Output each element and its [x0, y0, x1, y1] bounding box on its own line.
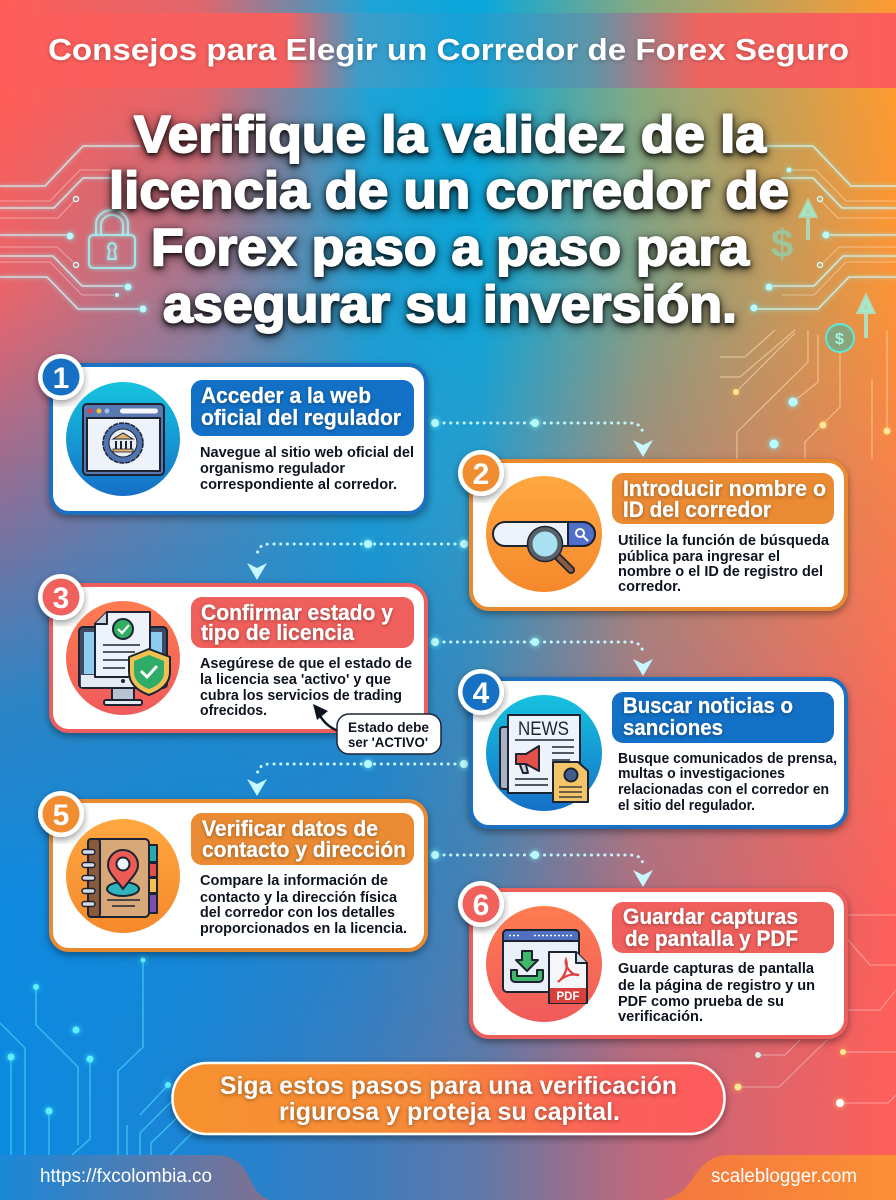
- text: step 3: cubra los servicios de trading: [200, 688, 402, 704]
- icon: download window and PDF file: PDF: [556, 991, 580, 1003]
- badge: number 2: [458, 450, 504, 496]
- badge: number 5: [38, 791, 84, 837]
- text: step 5: [200, 873, 407, 937]
- text: step 2: nombre o el ID de registro del: [618, 564, 823, 580]
- heading: step 3: Confirmar estado y: [201, 600, 394, 625]
- icon: background padlock: [89, 210, 135, 268]
- icon: monitor, licence document and shield: [66, 601, 180, 715]
- footer tab: right url: scaleblogger.com: [711, 1166, 857, 1187]
- circuit lines: upper right: [720, 330, 890, 459]
- heading: step 2: Introducir nombre o: [623, 476, 826, 501]
- icon: browser with regulator seal: [66, 382, 180, 496]
- icon: newspaper with megaphone: NEWS: [518, 719, 569, 740]
- icon: background dollar and arrow: $: [771, 222, 793, 266]
- header band: [0, 13, 896, 88]
- text: step 5: proporcionados en la licencia.: [200, 921, 407, 937]
- badge: number 6: 6: [473, 889, 489, 922]
- main title: licencia de un corredor de: [109, 162, 789, 220]
- text: step 5: del corredor con los detalles: [200, 905, 395, 921]
- footer tab: left url: [0, 1155, 270, 1200]
- main title: Verifique la validez de la: [134, 106, 767, 164]
- heading: step 4: sanciones: [623, 715, 723, 740]
- text: step 3: [200, 656, 412, 719]
- icon: background coin and arrow: $: [835, 331, 844, 348]
- text: step 6: de la página de registro y un: [618, 978, 815, 994]
- main title: asegurar su inversión.: [163, 276, 737, 334]
- panel: step 3: [38, 574, 441, 754]
- text: step 2: [618, 533, 830, 595]
- heading: step 5: [191, 813, 414, 865]
- heading: step 1: oficial del regulador: [201, 405, 401, 430]
- icon: address book with location pin: [66, 819, 180, 933]
- panel: step 2: [458, 450, 846, 609]
- callout: estado debe ser activo: [313, 704, 441, 754]
- icon: background coin and arrow: [826, 297, 873, 352]
- arrow: step 4 to 5: [247, 760, 468, 796]
- icon: search bar with magnifier: [486, 476, 602, 592]
- heading: step 1: Acceder a la web: [201, 383, 371, 408]
- circuit lines: lower left: [0, 958, 200, 1155]
- heading: step 6: de pantalla y PDF: [625, 926, 798, 951]
- text: step 5: Compare la información de: [200, 873, 388, 889]
- callout: closing message: Siga estos pasos para una verificación: [220, 1072, 677, 1100]
- text: step 1: organismo regulador: [200, 461, 345, 477]
- badge: number 3: [38, 574, 84, 620]
- badge: number 1: [38, 354, 84, 400]
- text: step 5: contacto y la dirección física: [200, 890, 398, 906]
- heading: step 6: [612, 902, 834, 953]
- circuit lines: title area: [0, 146, 896, 312]
- heading: step 4: [612, 692, 834, 743]
- text: step 1: correspondiente al corredor.: [200, 477, 397, 493]
- main title: [109, 106, 789, 334]
- text: step 2: corredor.: [618, 579, 681, 595]
- text: step 2: pública para ingresar el: [618, 549, 780, 565]
- panel: step 5: [38, 791, 426, 950]
- text: step 4: Busque comunicados de prensa,: [618, 751, 837, 767]
- badge: number 2: 2: [473, 458, 489, 491]
- text: step 6: PDF como prueba de su: [618, 994, 784, 1010]
- text: step 1: Navegue al sitio web oficial del: [200, 445, 414, 461]
- icon: download window and PDF file: [486, 906, 602, 1022]
- text: step 2: Utilice la función de búsqueda: [618, 533, 830, 549]
- panel: step 6: [458, 881, 846, 1037]
- text: step 6: [618, 961, 815, 1025]
- heading: step 3: tipo de licencia: [201, 620, 355, 645]
- heading: step 5: contacto y dirección: [202, 837, 406, 862]
- arrow: step 3 to 4: [431, 638, 653, 676]
- footer tab: left url: https://fxcolombia.co: [40, 1166, 212, 1187]
- text: step 1: [200, 445, 414, 493]
- text: step 3: ofrecidos.: [200, 703, 267, 719]
- circuit lines: lower right: [734, 915, 896, 1107]
- text: step 4: multas o investigaciones: [618, 766, 785, 782]
- callout: estado debe ser activo: Estado debe: [348, 719, 429, 735]
- callout: estado debe ser activo: ser 'ACTIVO': [348, 734, 428, 750]
- badge: number 3: 3: [53, 582, 69, 615]
- text: step 4: el sitio del regulador.: [618, 798, 755, 814]
- panel: step 4: [458, 669, 846, 827]
- text: step 6: Guarde capturas de pantalla: [618, 961, 815, 977]
- text: step 3: la licencia sea 'activo' y que: [200, 672, 391, 688]
- badge: number 4: [458, 669, 504, 715]
- heading: step 2: [612, 473, 834, 524]
- footer tab: right url: [663, 1155, 896, 1200]
- text: step 4: relacionadas con el corredor en: [618, 782, 829, 798]
- callout: closing message: rigurosa y proteja su capital.: [279, 1098, 620, 1126]
- heading: step 3: [191, 597, 414, 648]
- badge: number 1: 1: [53, 362, 69, 395]
- heading: step 5: Verificar datos de: [202, 816, 378, 841]
- icon: background dollar and arrow: [771, 202, 815, 266]
- arrow: step 1 to 2: [431, 419, 653, 457]
- badge: number 4: 4: [473, 677, 490, 710]
- badge: number 5: 5: [53, 799, 69, 832]
- arrow: step 5 to 6: [431, 851, 653, 887]
- callout: closing message: [172, 1063, 724, 1134]
- text: step 3: Asegúrese de que el estado de: [200, 656, 412, 672]
- header title: Consejos para Elegir un Corredor de Forex Seguro: [48, 32, 849, 67]
- text: step 4: [618, 751, 837, 814]
- heading: step 4: Buscar noticias o: [623, 693, 793, 718]
- panel: step 1: [38, 354, 426, 513]
- text: step 6: verificación.: [618, 1009, 703, 1025]
- badge: number 6: [458, 881, 504, 927]
- arrow: step 2 to 3: [247, 540, 468, 580]
- main title: Forex paso a paso para: [151, 219, 750, 277]
- heading: step 2: ID del corredor: [623, 497, 771, 522]
- heading: step 6: Guardar capturas: [623, 904, 798, 929]
- heading: step 1: [191, 380, 414, 436]
- icon: newspaper with megaphone: [486, 695, 602, 811]
